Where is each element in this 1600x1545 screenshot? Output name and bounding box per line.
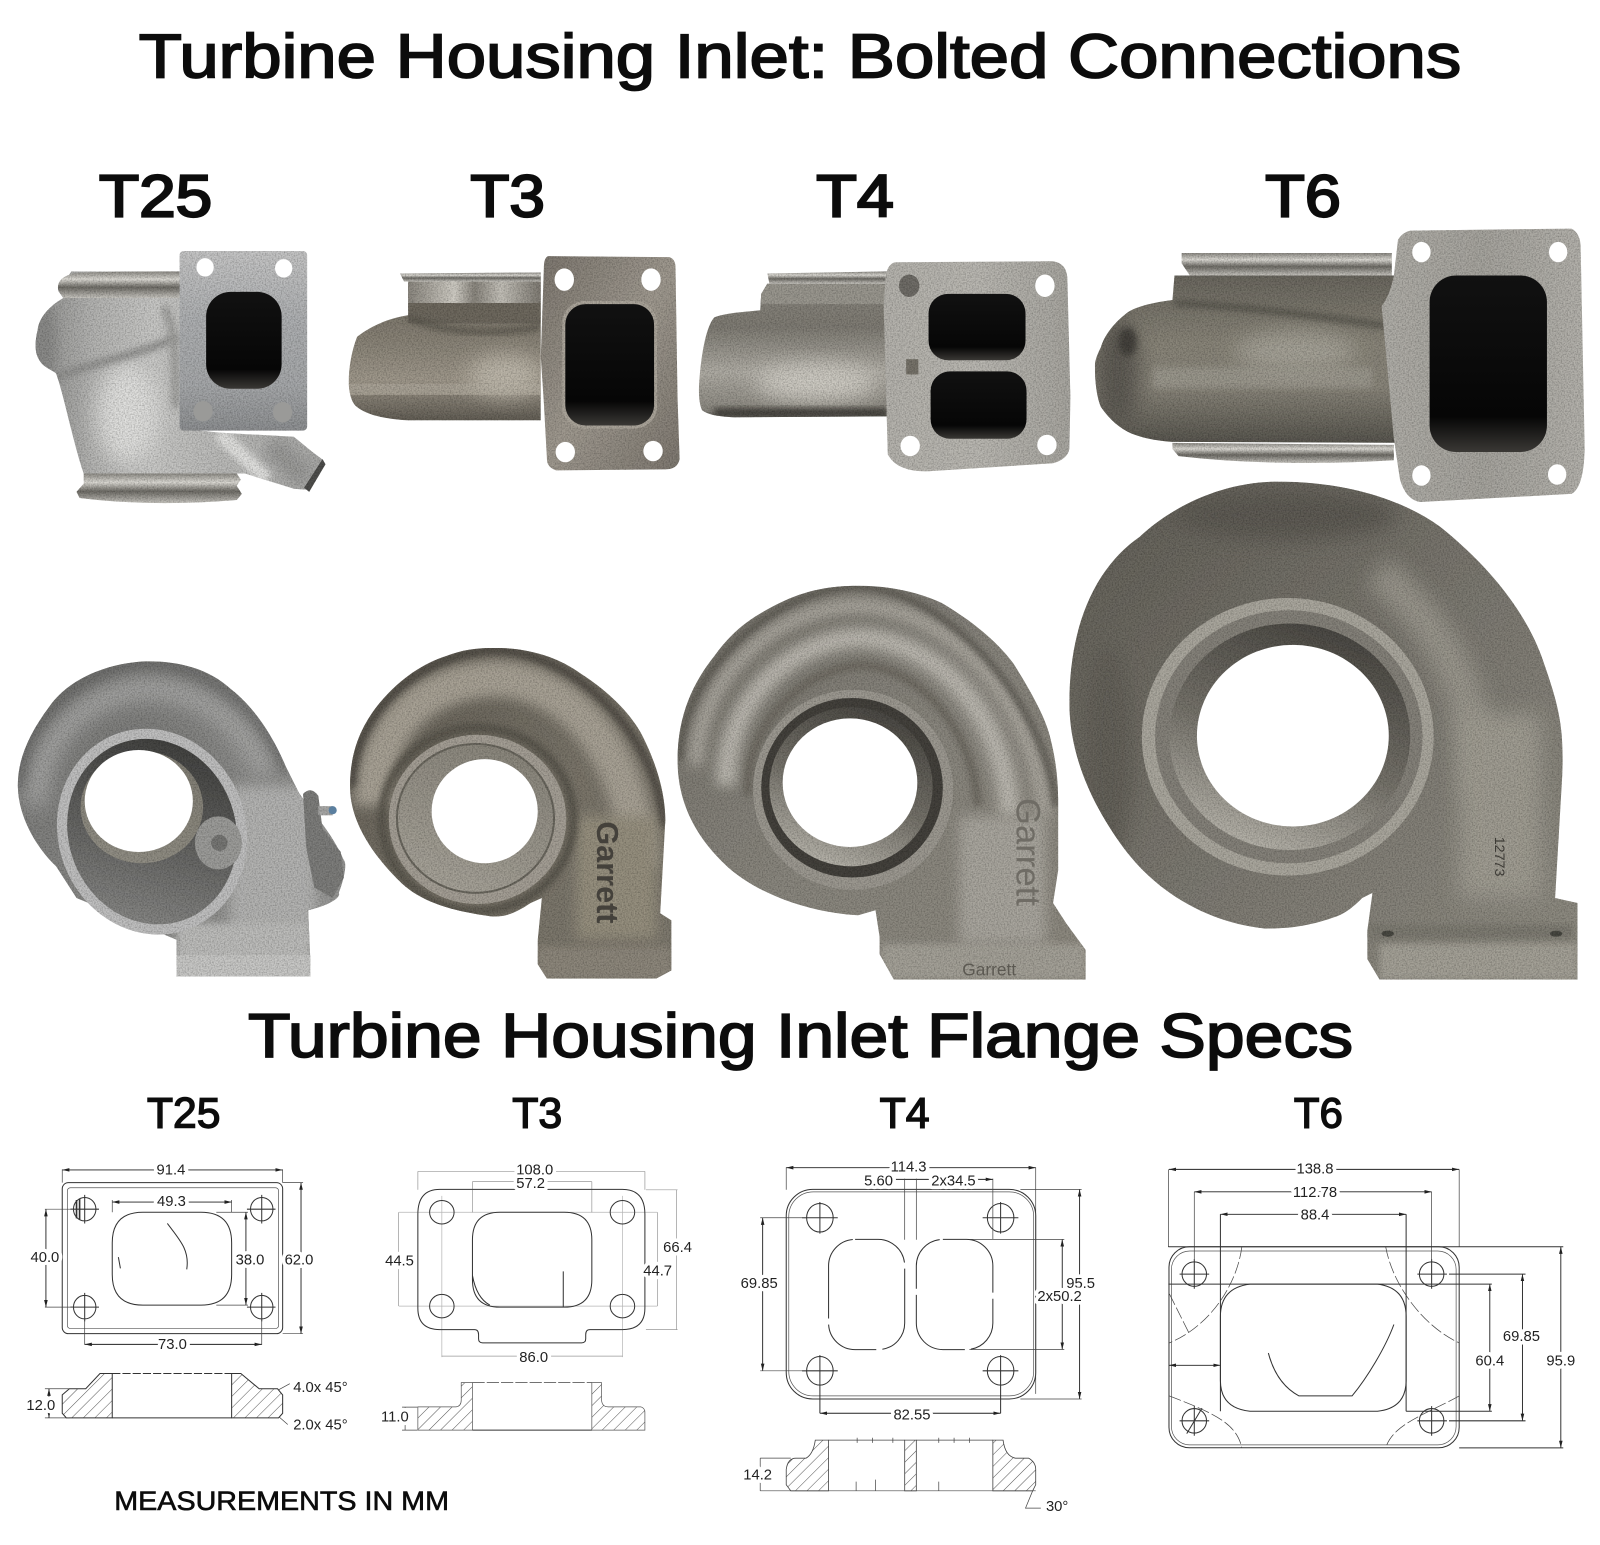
T6 dimension values: 88.4 bbox=[1301, 1207, 1329, 1223]
T25 section callouts: 4.0x 45° bbox=[293, 1380, 348, 1396]
spec label: T25: T25 bbox=[147, 1090, 220, 1138]
T3 dimension values: 44.7 bbox=[643, 1264, 672, 1280]
spec label: T3: T3 bbox=[512, 1090, 562, 1138]
T3 dimension lines bbox=[399, 1171, 678, 1356]
T4 dimension values bbox=[741, 1159, 1095, 1423]
T3 bolt holes bbox=[555, 268, 663, 462]
photo: T6 housing side view bbox=[1092, 229, 1585, 502]
T3 port bbox=[472, 1212, 592, 1307]
T25 section callouts: 12.0 bbox=[26, 1398, 55, 1414]
T6 bolt holes bbox=[1180, 1259, 1447, 1436]
T4 bolt holes bbox=[901, 274, 1057, 456]
T6 bore bbox=[1197, 645, 1389, 827]
photo: T25 housing front view bbox=[18, 661, 346, 976]
T3 bolt holes bbox=[399, 1196, 657, 1357]
T6 front casting bbox=[1061, 474, 1582, 985]
T3 dimension values: 57.2 bbox=[516, 1176, 545, 1192]
photo: T4 housing front view bbox=[673, 582, 1092, 985]
T4 section callouts: 30° bbox=[1046, 1499, 1068, 1515]
T4 Garrett lettering: Garrett bbox=[1008, 798, 1046, 906]
T25 dimension values: 91.4 bbox=[157, 1162, 185, 1178]
T6 dimension lines bbox=[1168, 1169, 1563, 1448]
T25 dimension lines bbox=[45, 1169, 303, 1345]
T6 dimension values: 60.4 bbox=[1475, 1353, 1504, 1369]
T3 port bbox=[565, 304, 654, 426]
T6 dimension values: 138.8 bbox=[1296, 1161, 1333, 1177]
heading: flange specs: Turbine Housing Inlet Flange Specs bbox=[248, 1002, 1353, 1071]
T3 bore bbox=[432, 759, 538, 863]
label: T3: T3 bbox=[470, 162, 545, 229]
T4 front casting bbox=[673, 582, 1092, 985]
T3 dimension values: 66.4 bbox=[663, 1240, 692, 1256]
T6 casting number: 12773 bbox=[1491, 837, 1507, 876]
T4 ports bbox=[829, 1239, 993, 1350]
T4 section bbox=[760, 1438, 1041, 1508]
T25 bolt holes bbox=[70, 1195, 276, 1321]
spec label: T6: T6 bbox=[1294, 1090, 1343, 1138]
T25 dimension values: 40.0 bbox=[31, 1250, 59, 1266]
label: T4: T4 bbox=[816, 162, 894, 229]
T4 dimension values: 95.5 bbox=[1066, 1276, 1095, 1292]
T6 hidden arcs bbox=[1169, 1247, 1459, 1448]
T3 side casting bbox=[347, 256, 680, 470]
T4 bore bbox=[783, 718, 917, 847]
T25 bolt stud tip bbox=[329, 806, 337, 814]
photo: T3 housing front view bbox=[342, 643, 679, 985]
label: T25: T25 bbox=[99, 162, 212, 229]
spec label: T4: T4 bbox=[880, 1090, 930, 1138]
T4 dimension lines bbox=[760, 1167, 1082, 1413]
T6 dimension values bbox=[1293, 1161, 1575, 1369]
T6 dimension values: 95.9 bbox=[1546, 1353, 1575, 1369]
T3 dimension values: 44.5 bbox=[385, 1253, 414, 1269]
T25 port bbox=[206, 292, 282, 389]
T4 dimension values: 5.60 bbox=[864, 1174, 893, 1190]
T25 dimension values: 62.0 bbox=[285, 1252, 313, 1268]
T6 bolt holes bbox=[1412, 242, 1567, 486]
T4 outline bbox=[786, 1189, 1036, 1399]
label: T6: T6 bbox=[1265, 162, 1341, 229]
T3 outline bbox=[418, 1189, 645, 1343]
T4 section callouts: 14.2 bbox=[743, 1468, 772, 1484]
photo: T25 housing side view bbox=[31, 251, 337, 503]
T25 front casting bbox=[18, 661, 346, 976]
T6 dimension values: 112.78 bbox=[1293, 1185, 1337, 1201]
diagram: T25 flange bbox=[26, 1162, 348, 1434]
T3 thickness value: 11.0 bbox=[381, 1409, 409, 1425]
T4 dimension values: 69.85 bbox=[741, 1276, 778, 1292]
T25 outline bbox=[62, 1183, 283, 1334]
T25 side casting bbox=[31, 251, 337, 503]
T25 section callouts bbox=[26, 1380, 348, 1434]
T4 dimension values: 2x34.5 bbox=[931, 1174, 976, 1190]
T25 section bbox=[45, 1373, 290, 1424]
T3 section bbox=[402, 1383, 645, 1430]
diagram: T4 flange bbox=[741, 1159, 1095, 1515]
T25 dimension values: 38.0 bbox=[236, 1252, 264, 1268]
T6 dimension values: 69.85 bbox=[1503, 1329, 1540, 1345]
T25 section callouts: 2.0x 45° bbox=[293, 1418, 348, 1434]
T6 outline bbox=[1169, 1247, 1459, 1448]
photo: T6 housing front view bbox=[1061, 474, 1582, 985]
T3 front casting bbox=[342, 643, 679, 985]
title: Turbine Housing Inlet: Bolted Connections bbox=[139, 23, 1461, 92]
T3 dimension values: 86.0 bbox=[519, 1350, 548, 1366]
T3 Garrett lettering: Garrett bbox=[590, 821, 624, 924]
T4 ports bbox=[929, 294, 1027, 439]
T4 dimension values: 2x50.2 bbox=[1037, 1289, 1082, 1305]
T4 side casting bbox=[694, 261, 1070, 471]
T4 dimension values: 114.3 bbox=[891, 1159, 927, 1175]
T25 dimension values: 73.0 bbox=[158, 1337, 187, 1353]
T6 port bbox=[1220, 1284, 1406, 1411]
T25 dimension values bbox=[31, 1162, 313, 1353]
T3 dimension values bbox=[385, 1162, 692, 1366]
photo: T3 housing side view bbox=[347, 256, 680, 470]
T3 dimension values: 108.0 bbox=[516, 1162, 553, 1178]
T4 bolt holes bbox=[802, 1202, 1018, 1413]
diagram: T6 flange bbox=[1168, 1161, 1575, 1448]
photo: T4 housing side view bbox=[694, 261, 1070, 471]
T25 dimension values: 49.3 bbox=[157, 1194, 186, 1210]
T25 bolt holes bbox=[193, 258, 292, 422]
note: measurements in mm: MEASUREMENTS IN MM bbox=[114, 1486, 449, 1516]
T6 port bbox=[1430, 276, 1547, 452]
T4 section callouts bbox=[743, 1468, 1068, 1515]
T4 base lettering: Garrett bbox=[962, 960, 1016, 980]
diagram: T3 flange bbox=[381, 1162, 692, 1430]
T4 dimension values: 82.55 bbox=[893, 1407, 930, 1423]
T25 bore bbox=[85, 750, 193, 852]
T6 side casting bbox=[1092, 229, 1585, 502]
T25 port bbox=[112, 1212, 232, 1305]
